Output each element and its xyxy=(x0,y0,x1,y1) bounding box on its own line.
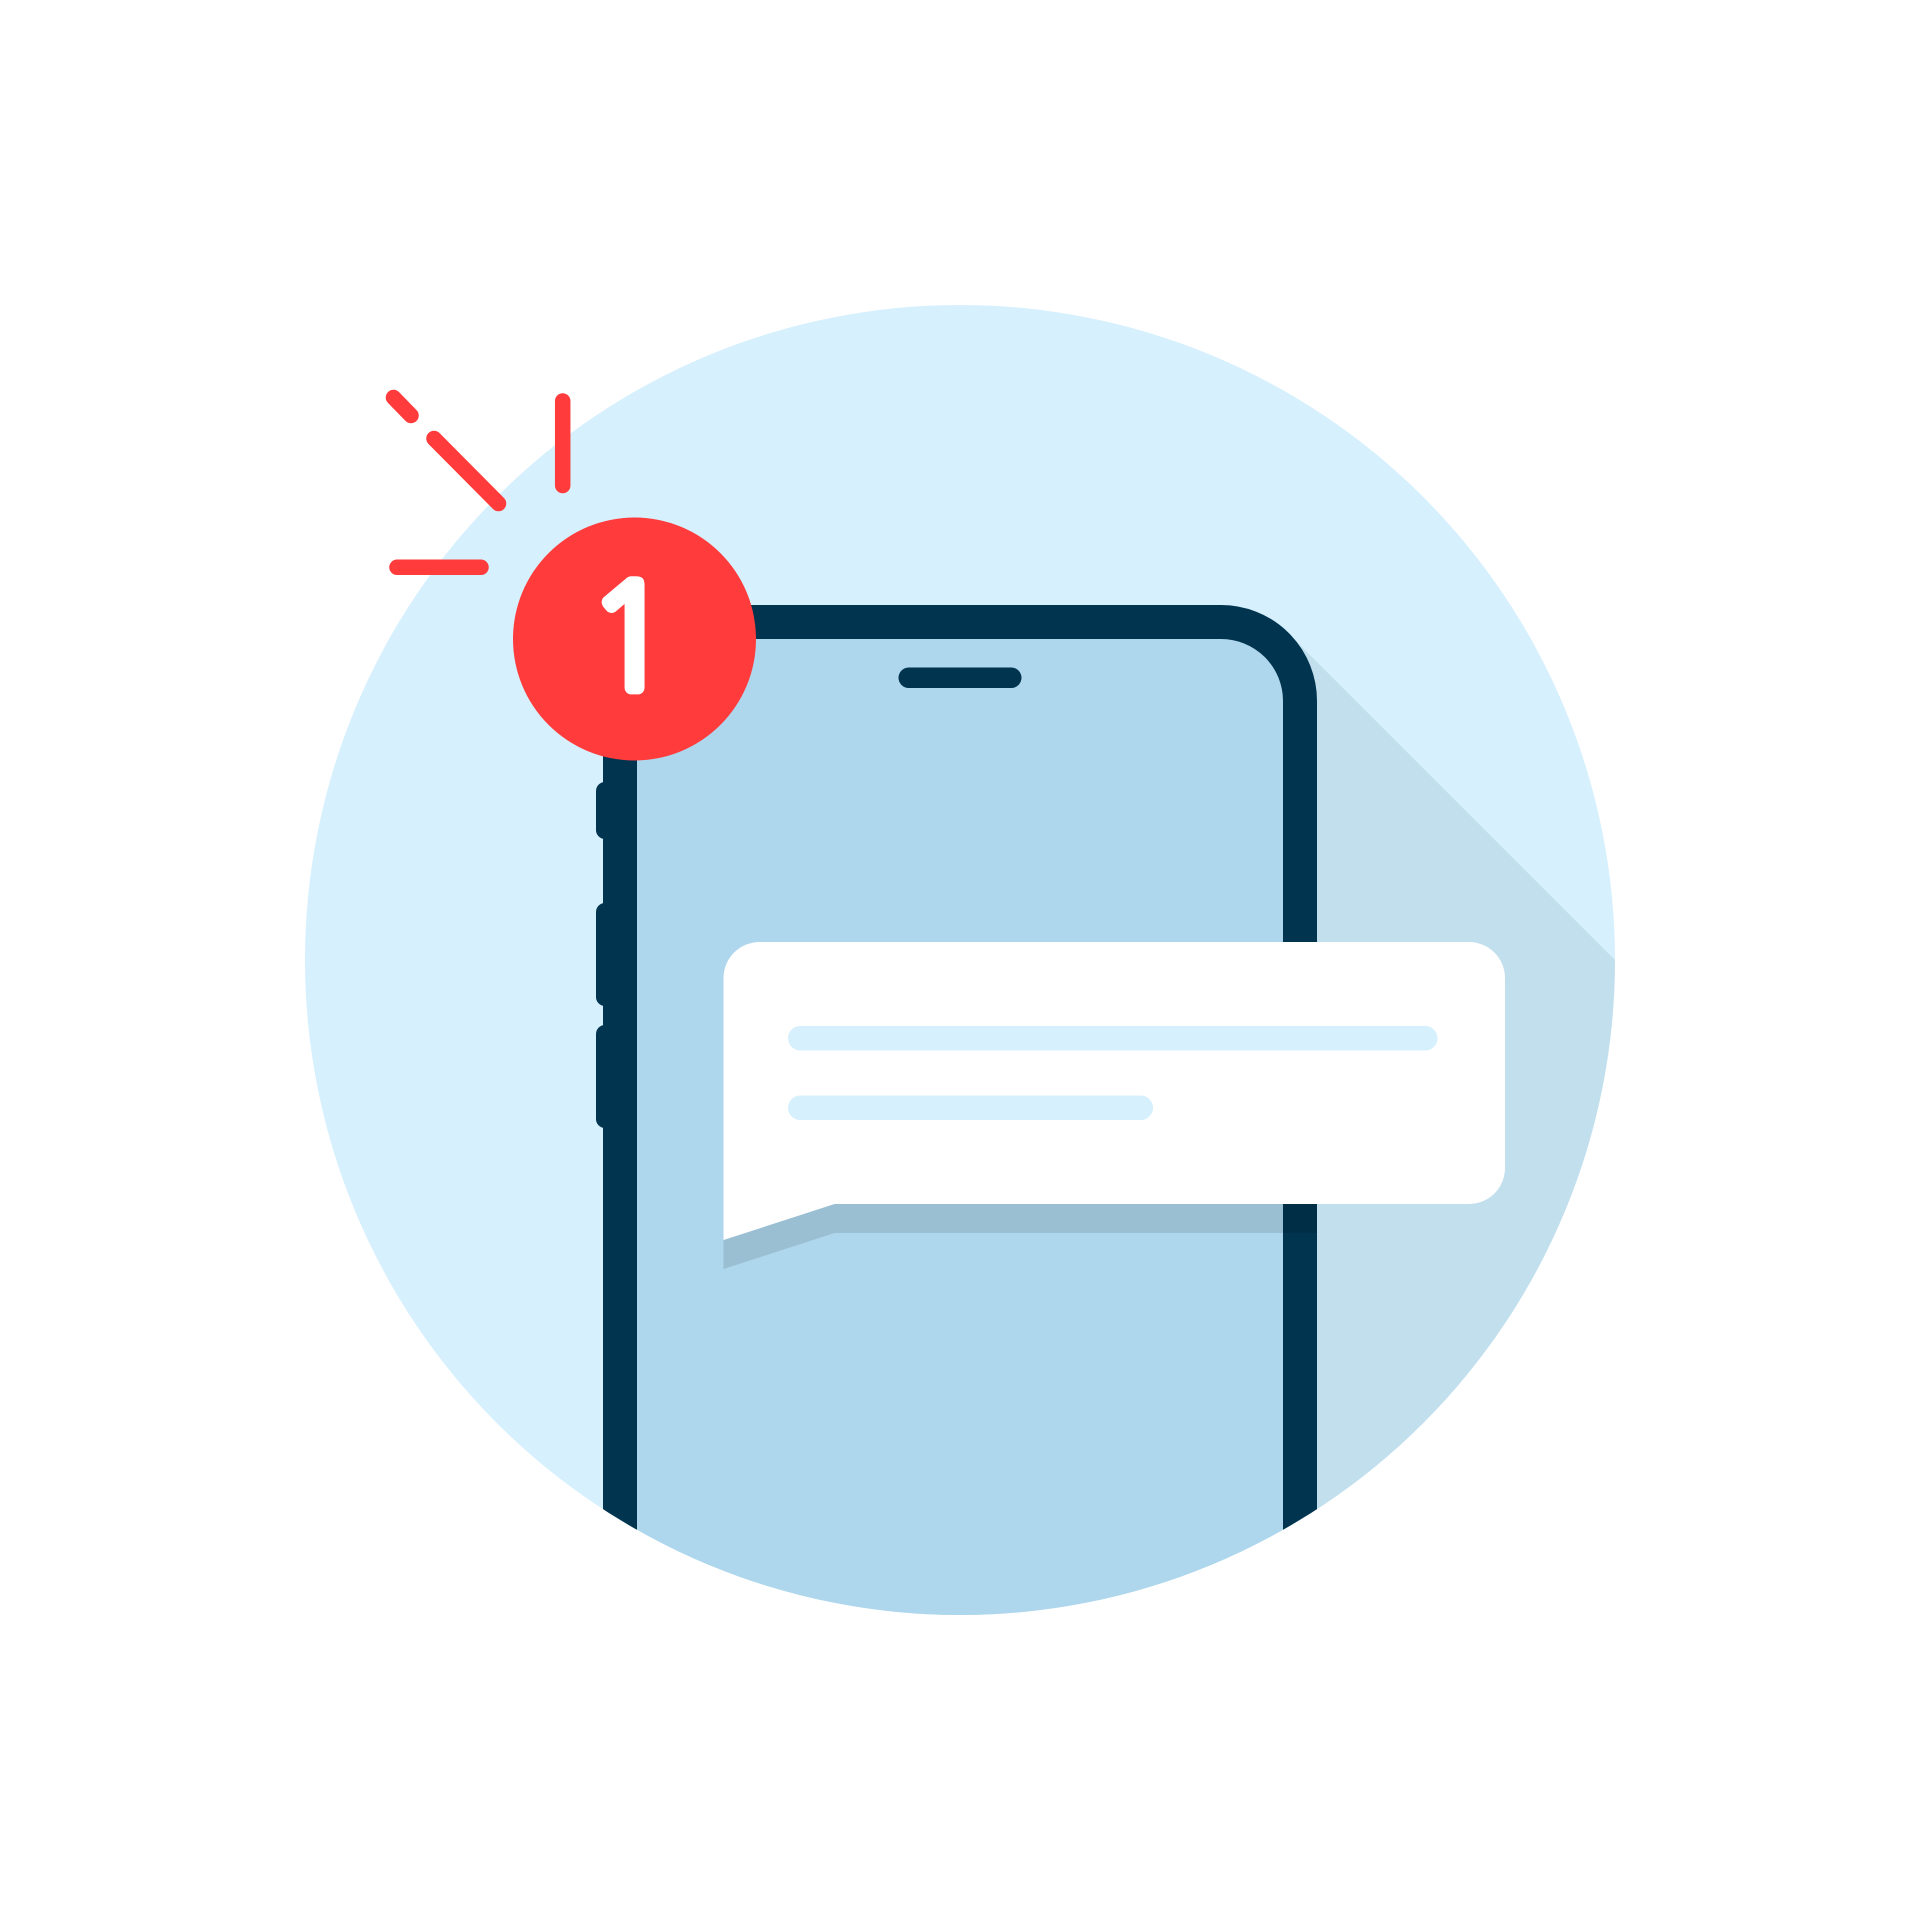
side button: bottom xyxy=(596,1025,603,1128)
phone screen xyxy=(620,622,1300,1700)
alert sparks xyxy=(394,398,563,567)
spark: short diagonal xyxy=(394,398,411,416)
bubble shadow xyxy=(724,1204,1317,1269)
message bubble xyxy=(724,942,1505,1240)
bubble body xyxy=(724,942,1505,1240)
phone frame xyxy=(620,622,1300,1700)
badge circle xyxy=(513,518,756,760)
spark: vertical xyxy=(555,401,570,486)
phone xyxy=(596,622,1300,1700)
message line 1 xyxy=(788,1026,1438,1050)
phone long shadow xyxy=(1296,641,1615,1520)
side button: top xyxy=(596,782,603,839)
notification illustration xyxy=(305,305,1615,1615)
notification badge xyxy=(513,518,756,760)
spark: horizontal xyxy=(397,560,481,575)
spark: long diagonal xyxy=(434,438,498,504)
side button: middle xyxy=(596,903,603,1006)
background circle xyxy=(305,305,1615,1615)
message line 2 xyxy=(788,1096,1153,1120)
badge number: 1 xyxy=(586,565,674,710)
phone speaker xyxy=(898,668,1022,688)
